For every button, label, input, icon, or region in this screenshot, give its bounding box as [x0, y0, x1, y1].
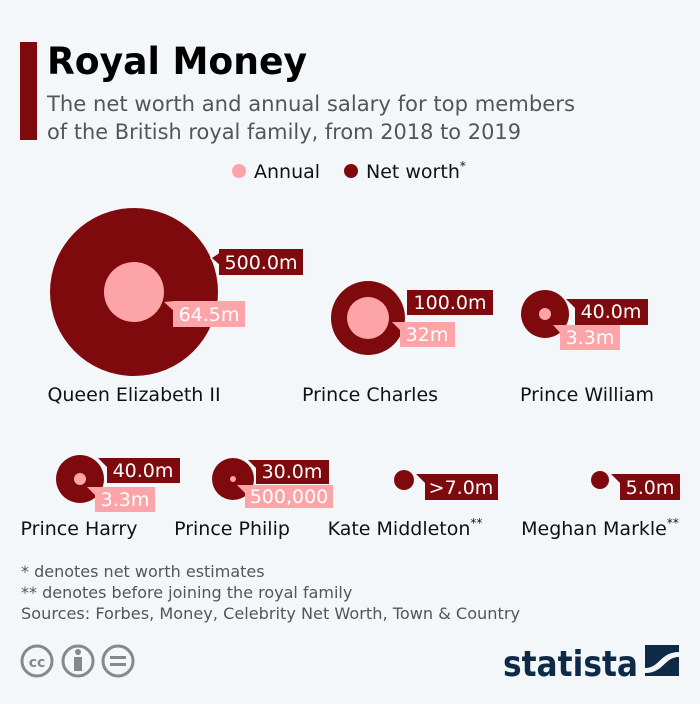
bubble: Prince Harry: 3.3m: [101, 489, 149, 511]
legend: [232, 159, 466, 183]
bubble: Prince Charles: 100.0m: [414, 292, 486, 314]
subtitle: of the British royal family, from 2018 to 2019: [47, 120, 521, 144]
bubble: Prince William: Prince William: [520, 384, 654, 406]
bubble: Kate Middleton: Kate Middleton: [328, 518, 470, 540]
bubble: Prince William: 40.0m: [581, 301, 641, 323]
title: Royal Money: [47, 40, 307, 83]
footnotes: ** denotes before joining the royal family: [21, 583, 352, 602]
bubble: Prince Philip: 30.0m: [262, 461, 322, 483]
footnotes: Sources: Forbes, Money, Celebrity Net Worth, Town & Country: [21, 604, 520, 623]
legend: Annual: [254, 161, 320, 183]
subtitle: [46, 92, 575, 144]
statista logo: statista: [503, 644, 638, 685]
bubble: Prince Harry: [21, 455, 180, 540]
bubble: Queen Elizabeth II: Queen Elizabeth II: [47, 384, 221, 406]
bubble: Prince Charles: [302, 281, 493, 406]
bubble: Prince Charles: Prince Charles: [302, 384, 438, 406]
title bar accent: [20, 42, 37, 140]
bubble: Prince Philip: 500,000: [250, 486, 328, 508]
subtitle: The net worth and annual salary for top members: [46, 92, 575, 116]
bubble: Prince Charles: 32m: [406, 324, 448, 346]
bubble: Kate Middleton: [328, 470, 498, 540]
bubble: Queen Elizabeth II: [47, 208, 303, 406]
bubble: Kate Middleton: >7.0m: [429, 477, 493, 499]
footnotes: [21, 562, 520, 623]
bubble: Meghan Markle: **: [667, 516, 679, 530]
bubble: Queen Elizabeth II: 500.0m: [225, 252, 297, 274]
bubble: Queen Elizabeth II: 64.5m: [179, 304, 239, 326]
bubble: Kate Middleton: **: [470, 516, 482, 530]
legend: Net worth: [366, 161, 460, 183]
bubble: Prince Philip: Prince Philip: [174, 518, 290, 540]
bubble: Meghan Markle: [521, 471, 680, 540]
bubble: Prince William: 3.3m: [566, 327, 614, 349]
icons: creative commons: [22, 646, 133, 676]
bubble: Meghan Markle: 5.0m: [626, 477, 674, 499]
legend: *: [460, 159, 466, 173]
icons: creative commons: cc: [29, 655, 45, 671]
bubble: Prince Philip: [174, 458, 333, 540]
bubble: Prince Harry: Prince Harry: [21, 518, 137, 540]
bubble: Meghan Markle: Meghan Markle: [521, 518, 667, 540]
footnotes: * denotes net worth estimates: [21, 562, 265, 581]
bubble: Prince William: [520, 290, 654, 406]
bubble: Prince Harry: 40.0m: [113, 460, 173, 482]
